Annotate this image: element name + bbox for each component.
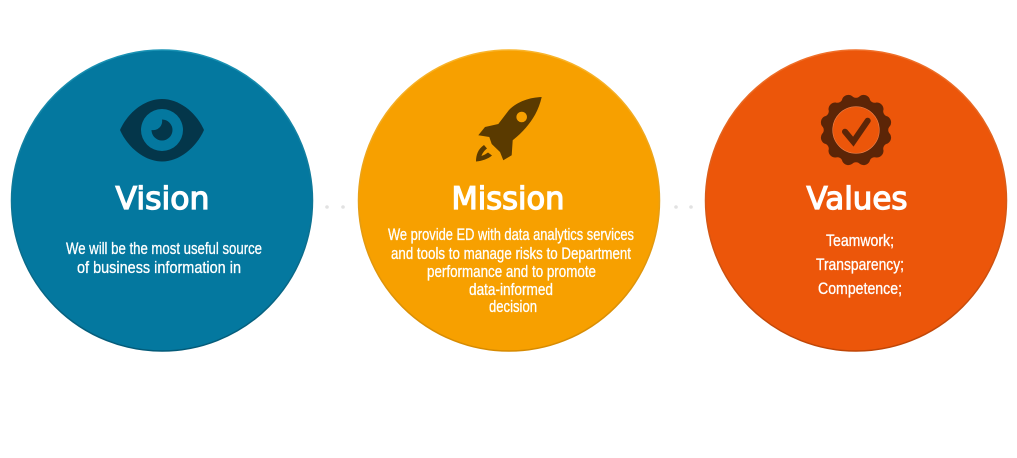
panel: vision	[12, 50, 312, 351]
mission text	[388, 225, 634, 316]
vision text: We will be the most useful source	[66, 239, 262, 258]
values text	[816, 231, 904, 298]
icon: rocket	[476, 97, 542, 162]
mission text: We provide ED with data analytics services	[388, 225, 634, 244]
heading: Values: Values	[806, 181, 908, 217]
vision circle	[12, 50, 312, 351]
vision text: of business information in	[77, 258, 241, 277]
mission text: data-informed	[469, 280, 553, 299]
heading: Vision: Vision	[116, 181, 210, 217]
mission text: and tools to manage risks to Department	[391, 244, 631, 263]
icon: badge with check	[822, 96, 890, 164]
panel: values	[706, 50, 1006, 351]
values text: Transparency;	[816, 255, 904, 274]
vision text	[66, 239, 262, 277]
heading: Mission: Mission	[452, 181, 564, 217]
icon: eye	[120, 99, 204, 162]
panel: mission	[358, 50, 660, 351]
values text: Competence;	[818, 279, 902, 298]
connector dots right	[674, 205, 693, 209]
mission text: decision	[489, 297, 537, 316]
mission text: performance and to promote	[427, 262, 596, 281]
mission circle	[358, 50, 660, 351]
connector dots left	[325, 205, 345, 209]
values circle	[706, 50, 1006, 351]
values text: Teamwork;	[826, 231, 894, 250]
